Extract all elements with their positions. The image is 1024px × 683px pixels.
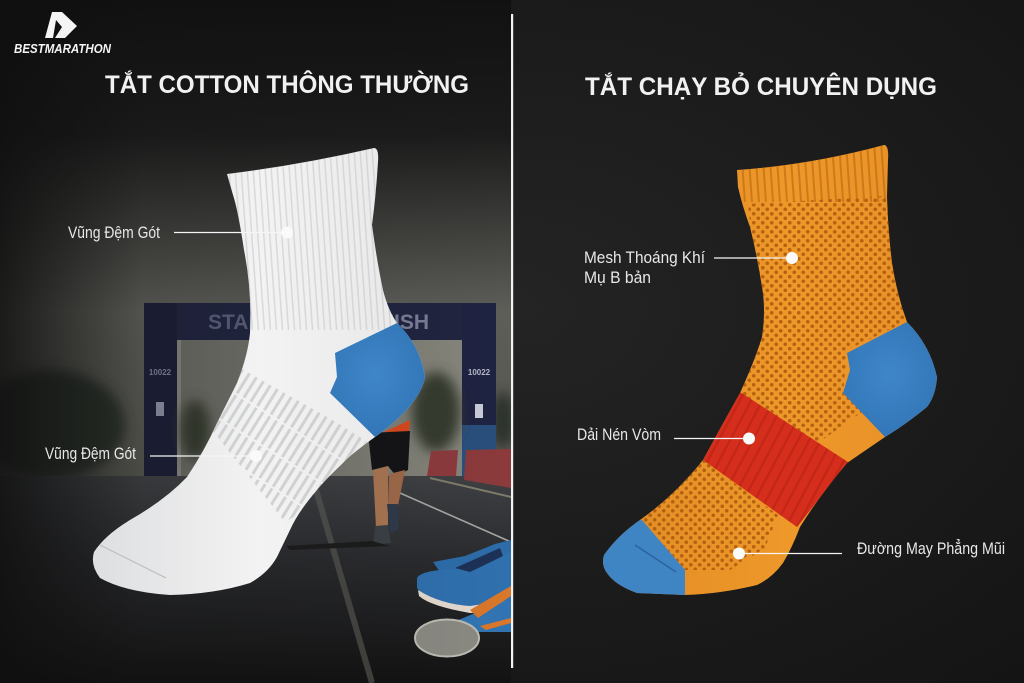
- panel: left race photo background: [0, 0, 515, 683]
- callout: lower cotton sock: Vũng Đệm Gót: [45, 445, 136, 463]
- callout: lower cotton sock: [45, 445, 262, 463]
- callout: flat toe seam: Đường May Phẳng Mũi: [857, 539, 1005, 558]
- photo: trees inside gate: [180, 372, 460, 460]
- orange sock: red arch band: [703, 392, 848, 527]
- photo: start finish gate: 10022: [468, 368, 491, 377]
- photo: start finish gate: 10022: [149, 368, 172, 377]
- heading: ordinary cotton socks: TẮT COTTON THÔNG THƯỜNG: [105, 69, 469, 99]
- photo: red banners: [427, 449, 511, 488]
- orange running sock: [603, 145, 937, 595]
- photo: running shoes: [417, 540, 511, 613]
- orange sock: blue toe: [603, 520, 685, 595]
- callout: arch compression band: [577, 426, 755, 444]
- divider line: [511, 14, 513, 668]
- callout: breathable mesh: [584, 248, 798, 287]
- logo wordmark: BESTMARATHON: [14, 42, 112, 56]
- callout: upper cotton sock: Vũng Đệm Gót: [68, 224, 160, 242]
- photo: medal with ribbon: [415, 586, 511, 656]
- orange sock: blue heel: [843, 322, 945, 437]
- heading: specialised running socks: TẮT CHẠY BỎ CHUYÊN DỤNG: [585, 71, 937, 101]
- photo: road surface: [5, 476, 511, 634]
- callout: breathable mesh: Mụ B bản: [584, 268, 651, 287]
- photo: start finish gate: START: [208, 311, 277, 334]
- photo: treeline: [0, 370, 515, 480]
- photo: start finish gate: FINISH: [360, 311, 429, 334]
- callout: breathable mesh: Mesh Thoáng Khí: [584, 248, 705, 267]
- logo: Bestmarathon: [14, 12, 112, 56]
- white cotton sock: [92, 148, 425, 595]
- callout: upper cotton sock: [68, 224, 293, 242]
- callout: flat toe seam: [733, 539, 1005, 560]
- photo: dark side vignette: [0, 104, 410, 653]
- white sock: blue heel: [330, 323, 430, 437]
- photo: start finish gate: [144, 303, 496, 476]
- callout: arch compression band: Dải Nén Vòm: [577, 426, 661, 444]
- photo: runner: [286, 420, 410, 550]
- icon: logo mark: [45, 12, 77, 38]
- photo: road markings: [316, 478, 511, 683]
